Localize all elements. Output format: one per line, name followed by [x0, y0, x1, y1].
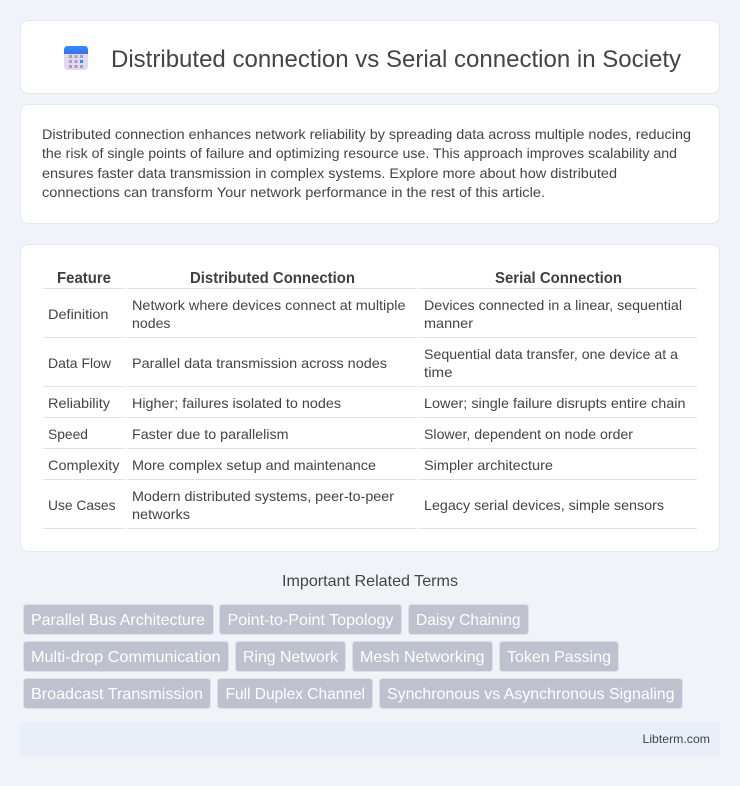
row: data flow: Parallel data transmission across nodes [132, 355, 387, 371]
tag cloud: Parallel Bus Architecture [31, 612, 205, 629]
heading: important related terms: Important Related Terms [282, 573, 458, 590]
row: reliability: Higher; failures isolated to nodes [132, 395, 341, 411]
intro text: ensures faster data transmission in complex systems. Explore more about how distributed [42, 165, 617, 181]
tag cloud: Ring Network [243, 649, 339, 666]
row: use cases: Modern distributed systems, peer-to-peer [132, 488, 394, 504]
row: use cases: networks [132, 506, 190, 522]
tag cloud: Daisy Chaining [416, 612, 520, 629]
panel: introduction [20, 104, 720, 224]
intro text [42, 126, 691, 200]
row: data flow: time [424, 364, 453, 380]
icon: calendar grid [64, 46, 88, 70]
intro text: connections can transform Your network performance in the rest of this article. [42, 184, 545, 200]
footer [20, 722, 720, 756]
tag cloud [24, 604, 682, 708]
tag cloud: Full Duplex Channel [226, 686, 365, 703]
row: data flow [48, 346, 678, 380]
row: speed: Speed [48, 426, 88, 442]
row: speed [48, 426, 633, 442]
row: reliability [48, 395, 686, 411]
row: complexity: Simpler architecture [424, 457, 553, 473]
tag cloud: Token Passing [507, 649, 611, 666]
tag cloud: Synchronous vs Asynchronous Signaling [387, 686, 674, 703]
row: reliability: Reliability [48, 395, 110, 411]
row: speed: Slower, dependent on node order [424, 426, 633, 442]
row: use cases [48, 488, 664, 522]
footer credit: Libterm.com [642, 732, 710, 746]
row: reliability: Lower; single failure disrupts entire chain [424, 395, 686, 411]
intro text: the risk of single points of failure and optimizing resource use. This approach improves scalability and [42, 145, 677, 161]
tag cloud: Point-to-Point Topology [228, 612, 394, 629]
intro text: Distributed connection enhances network reliability by spreading data across multiple nodes, reducing [42, 126, 691, 142]
row: use cases: Use Cases [48, 497, 116, 513]
row: definition: nodes [132, 315, 170, 331]
row: definition: Devices connected in a linear, sequential [424, 297, 682, 313]
table header: Serial Connection [495, 270, 622, 287]
title: Distributed connection vs Serial connection in Society [111, 46, 681, 73]
table header: Feature [57, 270, 111, 287]
row: complexity: Complexity [48, 457, 120, 473]
row: use cases: Legacy serial devices, simple sensors [424, 497, 664, 513]
row: data flow: Sequential data transfer, one device at a [424, 346, 678, 362]
tag cloud: Multi-drop Communication [31, 649, 220, 666]
row: complexity: More complex setup and maintenance [132, 457, 376, 473]
row: definition: Definition [48, 306, 108, 322]
row: data flow: Data Flow [48, 355, 112, 371]
row: definition: Network where devices connect at multiple [132, 297, 406, 313]
table header [57, 270, 622, 287]
row: definition: manner [424, 315, 473, 331]
row: definition [48, 297, 682, 331]
row: speed: Faster due to parallelism [132, 426, 288, 442]
panel: comparison table [20, 244, 720, 552]
row: complexity [48, 457, 553, 473]
table header: Distributed Connection [190, 270, 355, 287]
tag cloud: Mesh Networking [360, 649, 484, 666]
panel: header [20, 20, 720, 94]
tag cloud: Broadcast Transmission [31, 686, 203, 703]
